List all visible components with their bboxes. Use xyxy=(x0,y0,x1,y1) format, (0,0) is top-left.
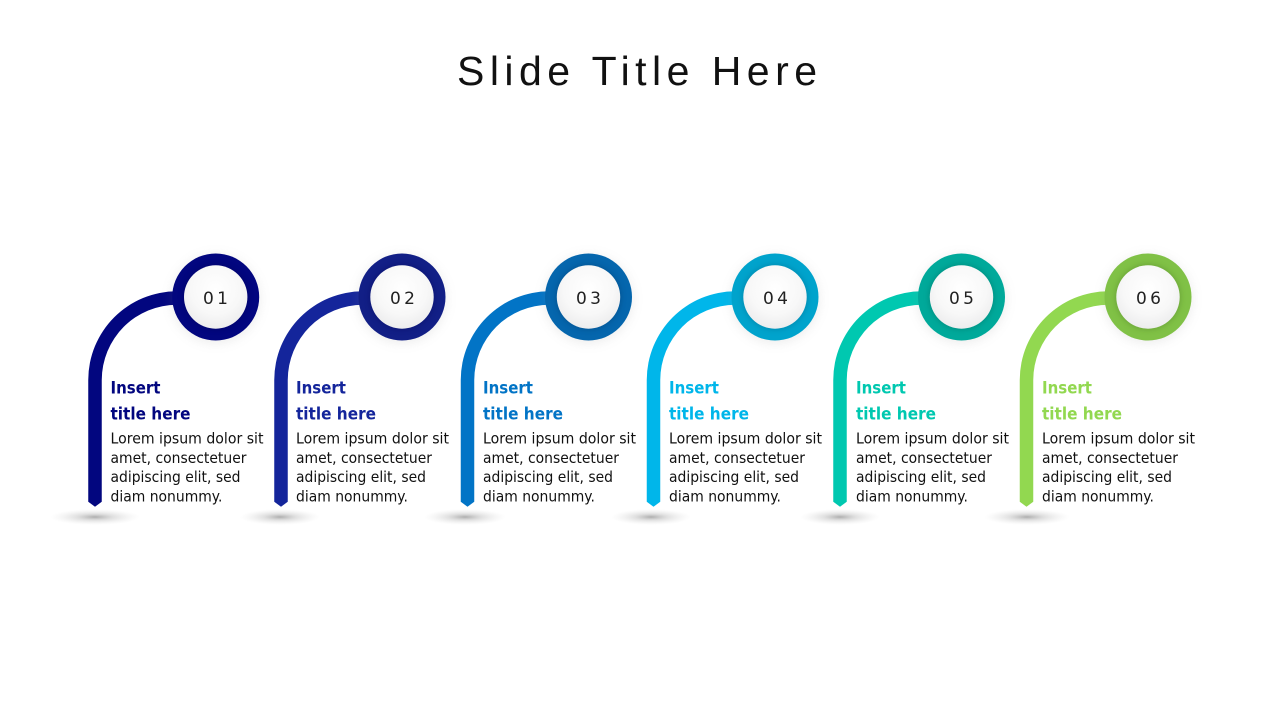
text block 03: Insert xyxy=(483,378,533,398)
text block 04: adipiscing elit, sed xyxy=(669,468,799,486)
number badge 02 xyxy=(358,254,446,342)
text block 05: Lorem ipsum dolor sit xyxy=(856,430,1009,448)
text block 02: Lorem ipsum dolor sit xyxy=(296,430,449,448)
number badge 03 xyxy=(545,254,632,342)
number badge 06 xyxy=(1104,254,1192,342)
number badge 04 xyxy=(732,254,818,342)
connector arc 06 xyxy=(1020,291,1108,507)
number badge 05: 05 xyxy=(949,289,974,309)
title: Slide Title Here xyxy=(457,48,817,94)
text block 06: Insert xyxy=(1042,378,1092,398)
text block 04: Insert xyxy=(669,378,719,398)
step 02 xyxy=(240,254,449,525)
floor shadow 06 xyxy=(984,509,1070,525)
text block 05: diam nonummy. xyxy=(856,488,968,506)
text block 02: Insert xyxy=(296,378,346,398)
text block 01 xyxy=(110,378,264,506)
text block 06: diam nonummy. xyxy=(1042,488,1154,506)
connector arc 02 xyxy=(274,291,363,507)
number badge 05 xyxy=(918,254,1005,342)
text block 03: adipiscing elit, sed xyxy=(483,468,613,486)
text block 01: Lorem ipsum dolor sit xyxy=(110,430,264,448)
number badge 03: 03 xyxy=(576,289,601,309)
text block 04: diam nonummy. xyxy=(669,488,781,506)
text block 04: title here xyxy=(669,404,749,424)
text block 03 xyxy=(483,378,636,506)
text block 03: Lorem ipsum dolor sit xyxy=(483,430,636,448)
text block 02: amet, consectetuer xyxy=(296,449,433,467)
number badge 04: 04 xyxy=(763,289,788,309)
text block 04 xyxy=(669,378,822,506)
text block 06: title here xyxy=(1042,404,1122,424)
floor shadow 01 xyxy=(50,509,140,525)
text block 06: adipiscing elit, sed xyxy=(1042,468,1172,486)
text block 02: title here xyxy=(296,404,376,424)
floor shadow 05 xyxy=(800,509,880,525)
text block 01: Insert xyxy=(110,378,161,398)
text block 06 xyxy=(1042,378,1195,506)
text block 05: amet, consectetuer xyxy=(856,449,993,467)
text block 03: amet, consectetuer xyxy=(483,449,620,467)
text block 02: adipiscing elit, sed xyxy=(296,468,426,486)
step 03 xyxy=(424,254,636,525)
connector arc 03 xyxy=(461,291,550,507)
step 06 xyxy=(984,254,1195,525)
floor shadow 02 xyxy=(240,509,320,525)
text block 06: Lorem ipsum dolor sit xyxy=(1042,430,1195,448)
text block 03: diam nonummy. xyxy=(483,488,595,506)
text block 01: title here xyxy=(110,404,190,424)
connector arc 04 xyxy=(647,291,736,507)
number badge 01 xyxy=(172,254,259,342)
text block 01: diam nonummy. xyxy=(110,488,222,506)
number badge 01: 01 xyxy=(203,289,228,309)
connector arc 01 xyxy=(88,291,177,507)
text block 06: amet, consectetuer xyxy=(1042,449,1179,467)
floor shadow 04 xyxy=(611,509,691,525)
text block 03: title here xyxy=(483,404,563,424)
text block 01: amet, consectetuer xyxy=(110,449,247,467)
text block 02 xyxy=(296,378,449,506)
text block 02: diam nonummy. xyxy=(296,488,408,506)
number badge 06: 06 xyxy=(1136,289,1161,309)
text block 05: title here xyxy=(856,404,936,424)
floor shadow 03 xyxy=(424,509,506,525)
number badge 02: 02 xyxy=(390,289,415,309)
text block 05: Insert xyxy=(856,378,906,398)
text block 05 xyxy=(856,378,1009,506)
step 01 xyxy=(50,254,264,525)
text block 05: adipiscing elit, sed xyxy=(856,468,986,486)
step 04 xyxy=(611,254,822,525)
connector arc 05 xyxy=(833,291,922,507)
text block 01: adipiscing elit, sed xyxy=(110,468,240,486)
step 05 xyxy=(800,254,1009,525)
text block 04: amet, consectetuer xyxy=(669,449,806,467)
text block 04: Lorem ipsum dolor sit xyxy=(669,430,822,448)
